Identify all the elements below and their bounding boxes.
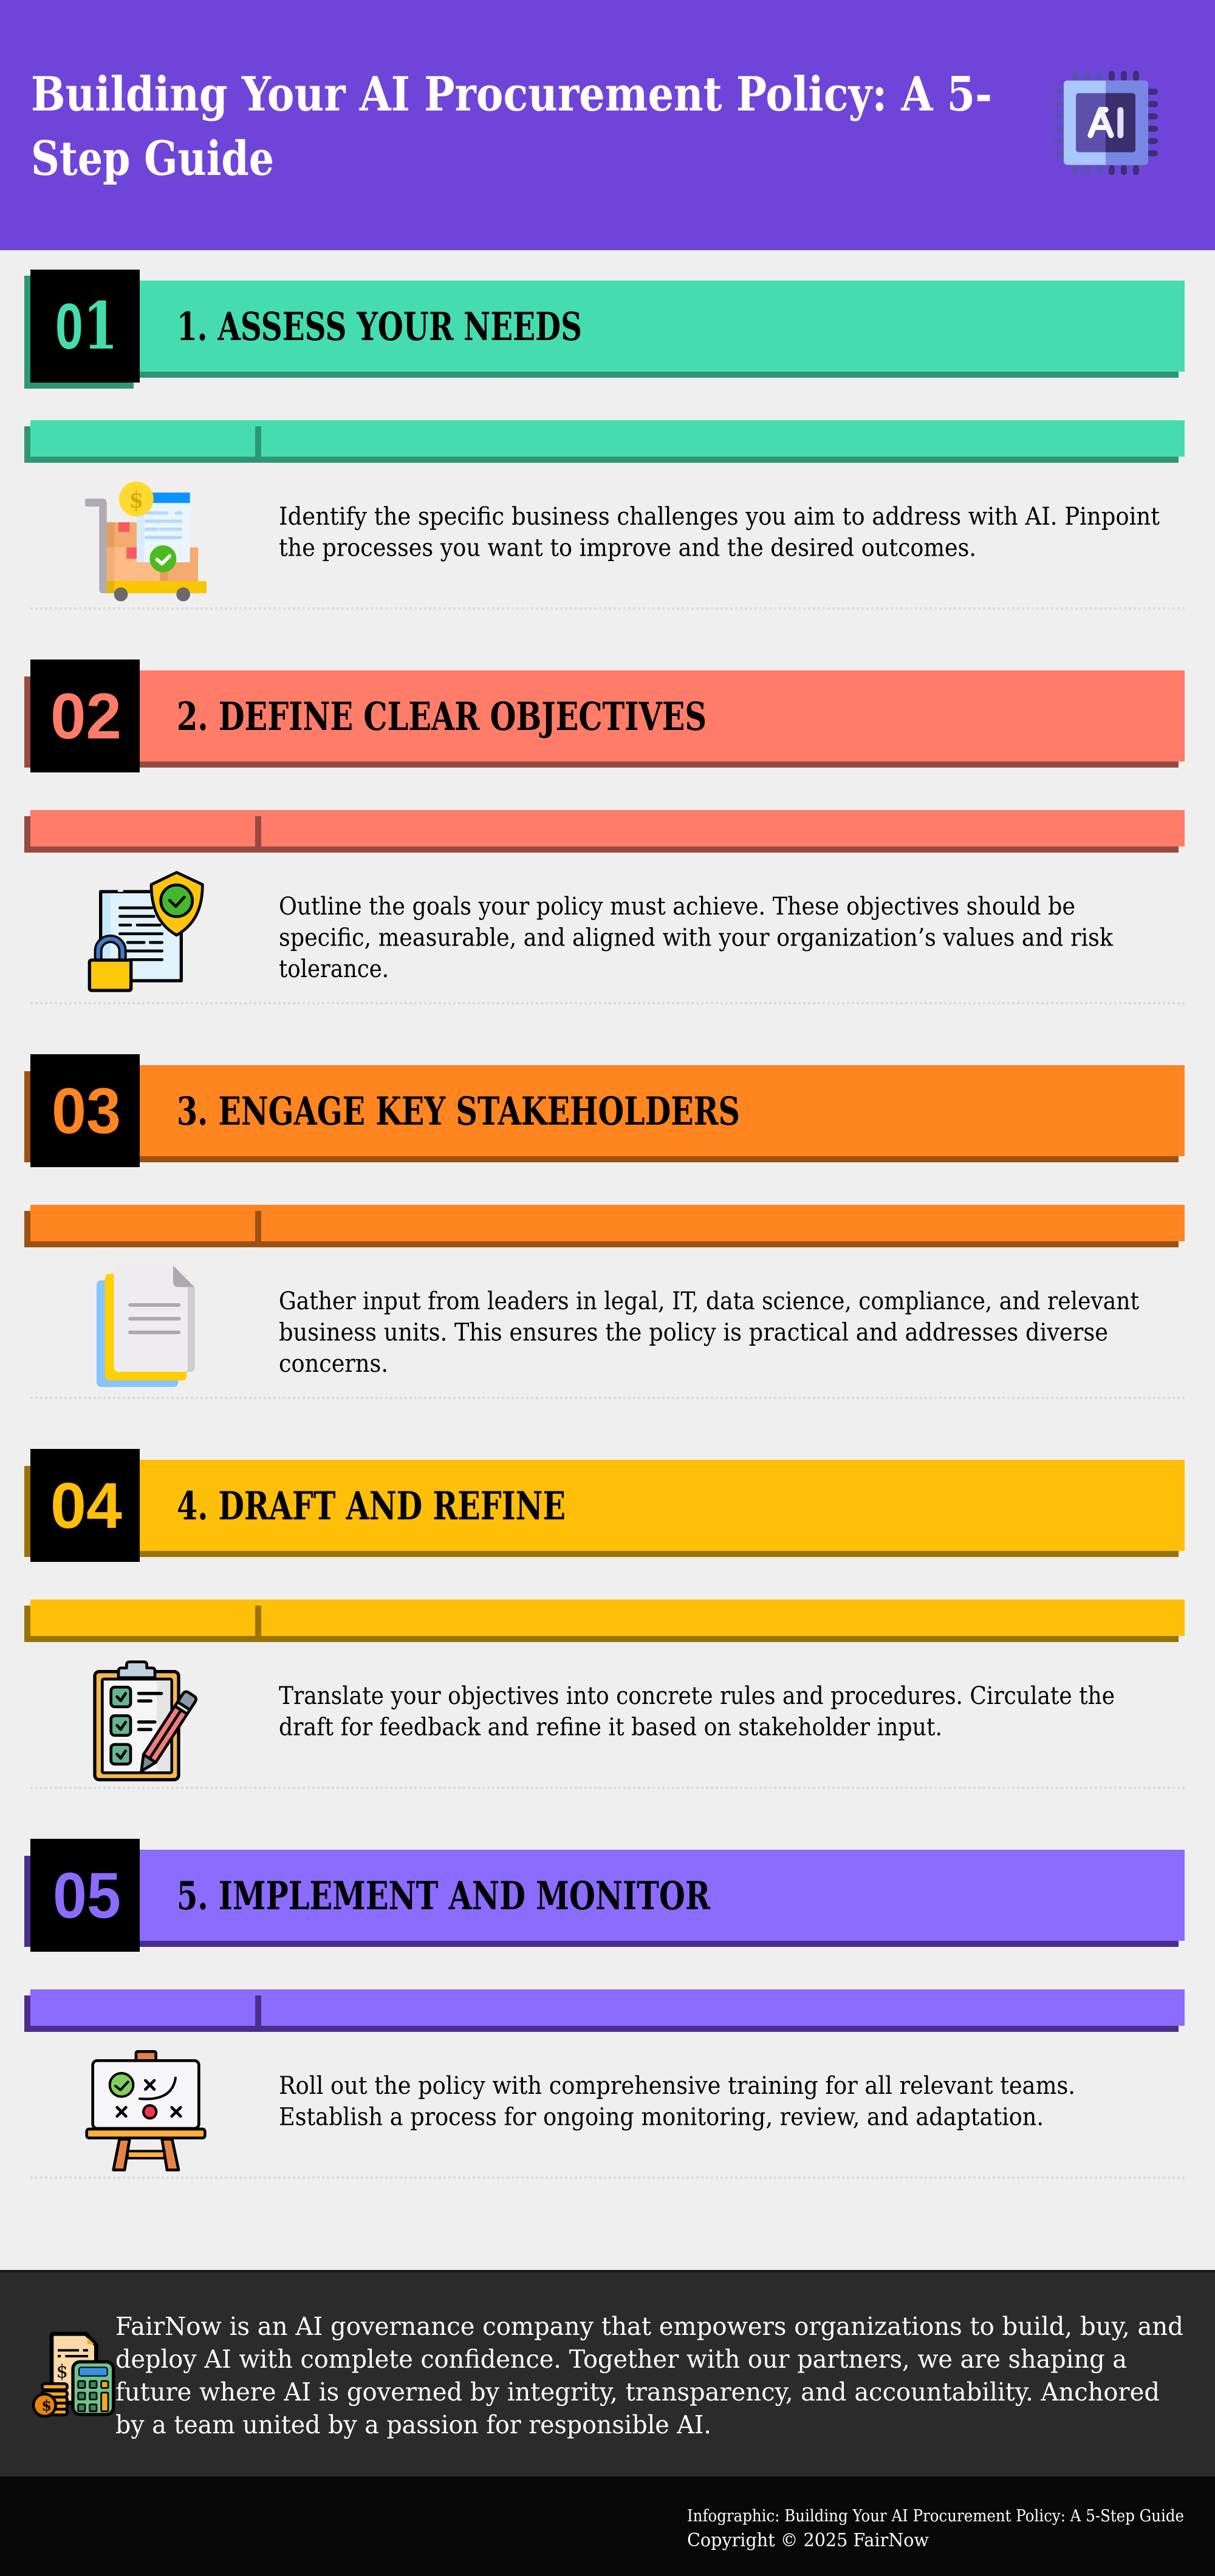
description — [279, 503, 1160, 562]
number badge: 05 — [53, 1859, 121, 1932]
about text: future where AI is governed by integrity, transparency, and accountability. Anchored — [115, 2377, 1160, 2407]
sub bar — [24, 420, 1185, 463]
title bar — [24, 670, 1185, 768]
description: Translate your objectives into concrete rules and procedures. Circulate the — [279, 1682, 1115, 1710]
about text — [115, 2312, 1183, 2439]
about panel — [0, 2270, 1215, 2476]
icon: clipboard checklist with pencil — [95, 1662, 197, 1780]
description: Identify the specific business challenges you aim to address with AI. Pinpoint — [279, 503, 1160, 531]
about text: deploy AI with complete confidence. Together with our partners, we are shaping a — [115, 2345, 1127, 2374]
about text: by a team united by a passion for responsible AI. — [115, 2410, 711, 2439]
description — [279, 893, 1114, 983]
title — [31, 67, 992, 186]
step 5 panel — [24, 1839, 1185, 2178]
title bar: 5. IMPLEMENT AND MONITOR — [177, 1873, 711, 1919]
icon: invoice, calculator and coins — [33, 2334, 114, 2416]
icon: strategy board on easel — [87, 2051, 205, 2170]
title bar: 3. ENGAGE KEY STAKEHOLDERS — [177, 1089, 740, 1134]
description: Gather input from leaders in legal, IT, data science, compliance, and relevant — [279, 1287, 1139, 1315]
number badge: 01 — [55, 288, 118, 364]
description: specific, measurable, and aligned with your organization’s values and risk — [279, 924, 1114, 952]
description: Outline the goals your policy must achieve. These objectives should be — [279, 893, 1075, 921]
title bar — [134, 281, 1185, 378]
title bar — [24, 1850, 1185, 1947]
number badge: 04 — [50, 1469, 122, 1542]
description: tolerance. — [279, 955, 389, 983]
copyright text: Copyright © 2025 FairNow — [687, 2530, 929, 2551]
icon: cart with invoice: $ — [129, 486, 143, 514]
title: Step Guide — [31, 131, 274, 186]
sub bar — [24, 810, 1185, 853]
description — [279, 1287, 1139, 1378]
number badge — [30, 1839, 140, 1952]
header banner — [0, 0, 1215, 250]
title bar — [24, 1460, 1185, 1557]
description — [279, 2072, 1075, 2131]
icon: document with shield and lock — [89, 873, 202, 990]
icon: cart with invoice — [85, 482, 207, 601]
description — [279, 1682, 1115, 1742]
number badge — [30, 659, 140, 772]
title: Building Your AI Procurement Policy: A 5- — [31, 67, 992, 122]
title bar: 4. DRAFT AND REFINE — [177, 1484, 566, 1529]
copyright text — [687, 2507, 1184, 2551]
step 1 panel — [24, 270, 1185, 608]
step 2 panel — [24, 659, 1185, 1003]
number badge: 02 — [50, 680, 122, 752]
icon: stacked documents — [97, 1263, 195, 1387]
title bar: 2. DEFINE CLEAR OBJECTIVES — [177, 694, 707, 740]
description: business units. This ensures the policy is practical and addresses diverse — [279, 1319, 1108, 1347]
icon: invoice, calculator and coins: $ — [41, 2396, 52, 2414]
description: Establish a process for ongoing monitoring, review, and adaptation. — [279, 2104, 1044, 2131]
sub bar — [24, 1600, 1185, 1642]
about text: FairNow is an AI governance company that empowers organizations to build, buy, and — [115, 2312, 1183, 2341]
footer — [0, 2476, 1215, 2576]
number badge — [30, 1449, 140, 1562]
icon: invoice, calculator and coins: $ — [56, 2361, 68, 2382]
description: draft for feedback and refine it based on stakeholder input. — [279, 1714, 942, 1742]
description: the processes you want to improve and the desired outcomes. — [279, 534, 976, 562]
number badge — [24, 270, 140, 389]
number badge: 03 — [52, 1074, 121, 1147]
description: concerns. — [279, 1350, 388, 1378]
number badge — [30, 1054, 140, 1167]
sub bar — [24, 1989, 1185, 2032]
title bar: 1. ASSESS YOUR NEEDS — [177, 304, 582, 350]
step 3 panel — [24, 1054, 1185, 1398]
title bar — [24, 1065, 1185, 1162]
step 4 panel — [24, 1449, 1185, 1788]
icon: AI chip — [1057, 74, 1155, 172]
sub bar — [24, 1205, 1185, 1247]
description: Roll out the policy with comprehensive training for all relevant teams. — [279, 2072, 1075, 2100]
